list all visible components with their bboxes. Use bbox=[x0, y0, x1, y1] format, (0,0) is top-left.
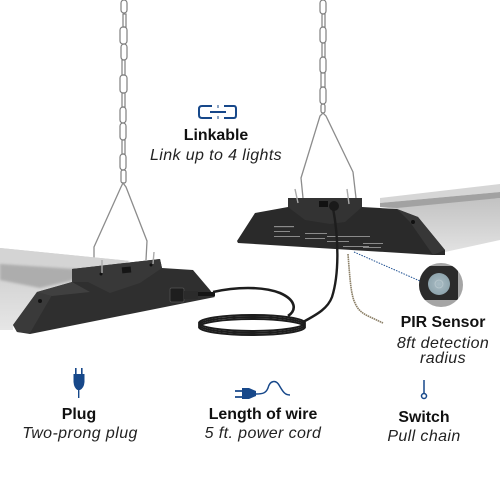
linkable description: Link up to 4 lights bbox=[150, 147, 282, 164]
left black end cap bbox=[13, 252, 215, 334]
right hanger wire bbox=[301, 113, 356, 198]
PIR sensor description: 8ft detection bbox=[397, 335, 489, 352]
left light fixture bbox=[0, 0, 215, 334]
pull chain bbox=[348, 254, 383, 323]
right black end cap bbox=[237, 189, 445, 255]
left plug connector bbox=[170, 288, 215, 302]
PIR sensor callout line bbox=[354, 252, 420, 281]
length of wire heading: Length of wire bbox=[209, 406, 317, 423]
length of wire description: 5 ft. power cord bbox=[205, 425, 322, 442]
linkable heading: Linkable bbox=[184, 127, 248, 144]
right chain bbox=[320, 0, 326, 113]
left hanger wire bbox=[94, 183, 147, 268]
left chain bbox=[120, 0, 127, 183]
product label bbox=[274, 226, 383, 248]
PIR sensor inset bbox=[415, 263, 463, 307]
cord grommet bbox=[329, 201, 339, 211]
linkable icon bbox=[199, 105, 236, 119]
wire icon bbox=[235, 382, 290, 399]
switch description: Pull chain bbox=[387, 428, 461, 445]
switch heading: Switch bbox=[398, 409, 450, 426]
plug icon bbox=[74, 368, 84, 398]
right light fixture bbox=[199, 0, 500, 335]
plug heading: Plug bbox=[62, 406, 96, 423]
PIR sensor description bbox=[397, 335, 489, 367]
PIR sensor description: radius bbox=[420, 350, 466, 367]
PIR sensor heading: PIR Sensor bbox=[401, 314, 485, 331]
switch icon bbox=[422, 380, 426, 398]
right silver housing bbox=[380, 184, 500, 252]
power cord bbox=[199, 208, 337, 335]
left silver housing bbox=[0, 248, 130, 330]
plug description: Two-prong plug bbox=[22, 425, 138, 442]
